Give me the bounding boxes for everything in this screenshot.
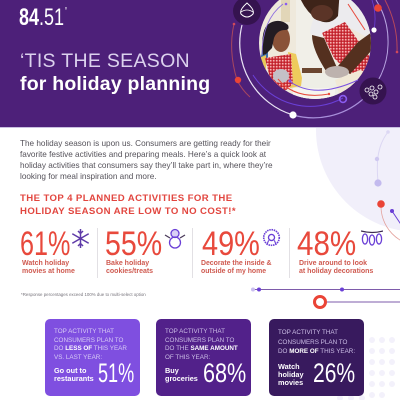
card text: TOP ACTIVITY THAT xyxy=(278,329,338,336)
card activity: Watch xyxy=(278,362,300,371)
stat: 55%: cookies/treats xyxy=(106,268,153,275)
card activity: restaurants xyxy=(54,374,94,383)
icon: wreath xyxy=(262,228,280,246)
title xyxy=(20,50,210,95)
card: same amount xyxy=(156,319,251,396)
girl xyxy=(261,50,268,63)
card text: TOP ACTIVITY THAT xyxy=(165,328,225,335)
stat: 55%: 55% xyxy=(105,225,162,263)
stat: 61%: movies at home xyxy=(22,268,75,275)
card: more of xyxy=(269,319,364,396)
card: less of xyxy=(45,319,140,396)
icon: ornament xyxy=(233,0,261,25)
stat: 48%: 48% xyxy=(297,225,356,263)
stat: 48%: at holiday decorations xyxy=(299,268,373,275)
footnote: *Response percentages exceed 100% due to multi-select option xyxy=(21,292,146,297)
card number: 68% xyxy=(203,358,246,388)
card number: 51% xyxy=(98,358,134,388)
card text: CONSUMERS PLAN TO xyxy=(54,337,123,344)
title: for holiday planning xyxy=(20,73,210,95)
card activity xyxy=(54,366,94,383)
icon: snowflake xyxy=(72,229,89,248)
card text: OF THIS YEAR: xyxy=(165,354,210,361)
card number: 26% xyxy=(313,358,355,388)
title: ‘TIS THE SEASON xyxy=(20,50,190,72)
icon: berries xyxy=(360,78,386,104)
card text: DO THE SAME AMOUNT xyxy=(165,345,238,352)
hero photo with rings xyxy=(231,0,398,119)
card activity: groceries xyxy=(165,374,198,383)
stat: 55% xyxy=(105,225,186,275)
section heading: HOLIDAY SEASON ARE LOW TO NO COST!* xyxy=(20,206,236,217)
card text xyxy=(165,328,238,361)
stat: 49%: 49% xyxy=(202,225,260,263)
logo: ° xyxy=(65,6,67,15)
header banner xyxy=(0,0,400,128)
intro paragraph: The holiday season is upon us. Consumers are getting ready for their xyxy=(20,138,271,148)
intro paragraph: looking for meal inspiration and more. xyxy=(20,172,157,181)
card activity: holiday xyxy=(278,370,304,379)
card activity: Buy xyxy=(165,366,179,375)
icon: string lights xyxy=(361,230,383,246)
card activity xyxy=(165,366,198,383)
intro paragraph: holiday activities that consumers say they’ll take part in, where they’re xyxy=(20,161,273,170)
stat: 48%: Drive around to look xyxy=(299,260,367,266)
card text: DO LESS OF THIS YEAR xyxy=(54,345,127,352)
card activity xyxy=(278,362,304,387)
card activity: Go out to xyxy=(54,366,86,375)
card text xyxy=(54,328,127,361)
section heading xyxy=(20,193,236,217)
intro paragraph xyxy=(20,138,273,181)
icon: snowman xyxy=(164,228,186,249)
stat: 61% xyxy=(20,225,89,275)
intro paragraph: favorite festive activities and preparing meals. Here’s a quick look at xyxy=(20,150,266,159)
card text xyxy=(278,329,355,355)
card text: CONSUMERS PLAN TO xyxy=(165,337,234,344)
card text: CONSUMERS PLAN TO xyxy=(278,338,347,346)
card activity: movies xyxy=(278,378,303,387)
stat: 61%: Watch holiday xyxy=(22,260,69,266)
stat: 61%: 61% xyxy=(20,225,70,263)
card text: DO MORE OF THIS YEAR: xyxy=(278,348,355,355)
man xyxy=(336,0,371,40)
section heading: THE TOP 4 PLANNED ACTIVITIES FOR THE xyxy=(20,193,233,204)
card text: VS. LAST YEAR: xyxy=(54,354,102,361)
stat: 49%: Decorate the inside & xyxy=(201,260,271,266)
stat: 49% xyxy=(201,225,280,275)
card text: TOP ACTIVITY THAT xyxy=(54,328,114,335)
stat: 49%: outside of my home xyxy=(201,268,266,275)
stat: 48% xyxy=(297,225,383,275)
logo: 84.51 xyxy=(19,4,64,31)
stat: 55%: Bake holiday xyxy=(106,260,149,266)
